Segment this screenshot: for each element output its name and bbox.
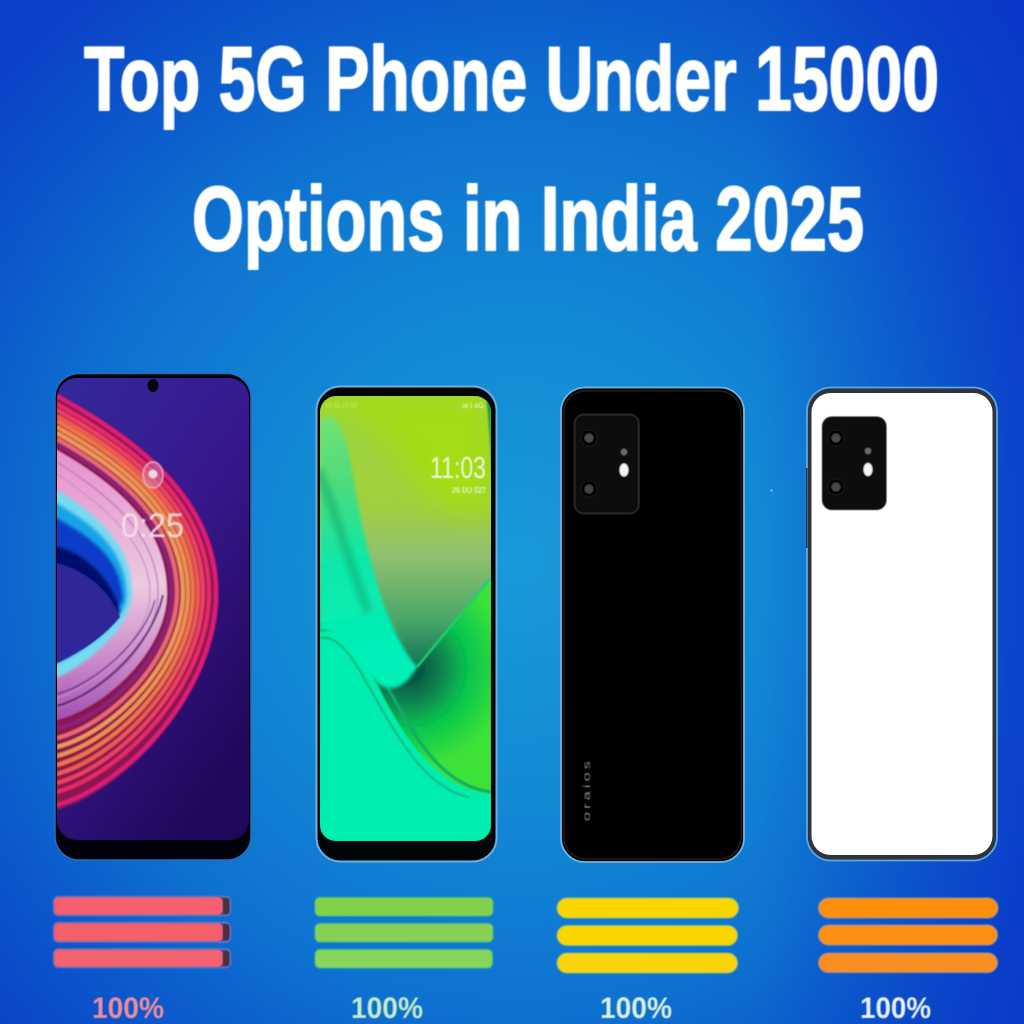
phone 4: back, white — [806, 388, 997, 860]
percentage labels — [92, 992, 931, 1024]
title — [84, 29, 939, 270]
lock-screen clock: 26 DU 527 — [452, 486, 486, 495]
screen wallpaper — [40, 378, 249, 840]
screen wallpaper — [318, 396, 491, 841]
side button — [806, 468, 808, 548]
lock-screen clock — [325, 403, 486, 495]
phone 1: front, purple wallpaper — [40, 374, 251, 860]
camera module — [574, 414, 639, 514]
bars: green group — [315, 898, 493, 968]
bars: yellow group — [557, 898, 738, 973]
phone 2: front, green wallpaper — [316, 386, 496, 862]
lock-screen clock: .al l 4G — [460, 403, 484, 410]
clock and lock icon — [121, 462, 184, 545]
phone 3: back, black — [561, 388, 744, 862]
brand mark: oraios — [582, 758, 593, 821]
stray speck — [770, 489, 773, 492]
punch-hole camera — [148, 379, 158, 392]
lock-screen clock: 11:03 — [430, 450, 486, 485]
bars: orange group — [818, 898, 998, 972]
clock and lock icon: 0:25 — [121, 507, 184, 545]
camera module — [822, 416, 886, 510]
lock-screen clock: 10:34 12 68 — [325, 403, 357, 410]
bars: red group — [54, 896, 230, 968]
